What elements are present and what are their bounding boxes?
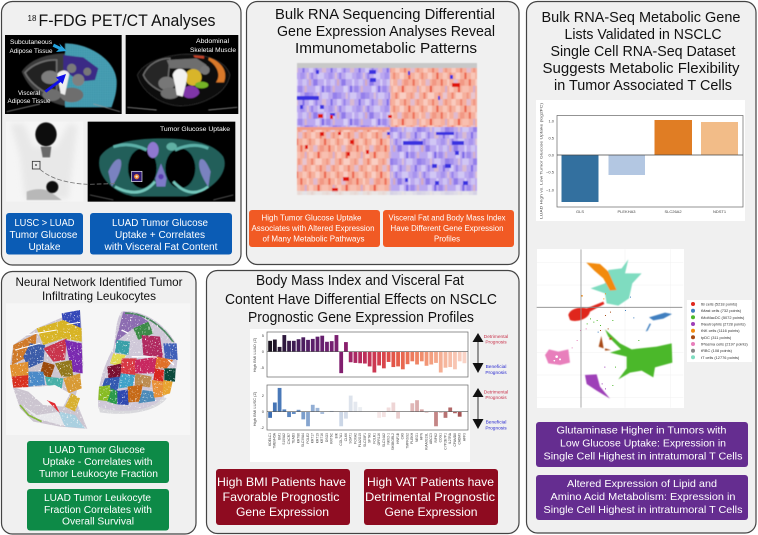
gene name axis labels: TMEM45A: [273, 432, 277, 449]
title: neural network: Neural Network Identified Tumor: [16, 275, 182, 289]
callout: high VAT detrimental: High VAT Patients have: [367, 475, 494, 489]
callout: high VAT detrimental: Gene Expression: [384, 505, 478, 519]
callout: LUSC greater than LUAD: LUSC > LUAD: [14, 218, 74, 229]
callout: high tumor glucose uptake: Associates with Altered Expression: [252, 224, 374, 233]
image: PET/CT fusion slice: [40, 122, 235, 202]
callout: leukocyte fraction correlates with survival: Fraction Correlates with: [44, 505, 152, 516]
callout: visceral fat and BMI: Have Different Gene Expression: [390, 224, 504, 233]
gene name axis labels: S100A2: [282, 433, 286, 445]
panel: BMI and visceral fat prognostic profiles: [206, 270, 519, 534]
legend: cell types: tT cells (12776 points): [701, 355, 740, 360]
callout: LUSC greater than LUAD: Uptake: [28, 242, 61, 253]
panel: single cell validation: [526, 2, 756, 533]
callout: glucose uptake correlates with visceral fat: [90, 213, 232, 254]
legend: cell types: [687, 300, 752, 362]
callout: glutaminase: Glutaminase Higher in Tumors with: [556, 424, 727, 436]
gene name axis labels: AFF3: [462, 433, 466, 441]
callout: glucose uptake correlates with leukocyte fraction: Uptake - Correlates with: [42, 457, 152, 468]
title: BMI and visceral fat: Prognostic Gene Expression Profiles: [248, 309, 474, 326]
image: CT skeletal muscle: [126, 35, 238, 114]
callout: glucose uptake correlates with leukocyte fraction: Tumor Leukocyte Fraction: [39, 469, 158, 480]
label: tumor glucose uptake: Tumor Glucose Uptake: [160, 126, 230, 133]
callout: glutaminase: Single Cell Highest in intratumoral T Cells: [544, 450, 742, 462]
left tissue section: [10, 310, 87, 429]
callout: high tumor glucose uptake: of Many Metabolic Pathways: [262, 234, 364, 244]
gene name axis labels: FOLR1: [372, 433, 376, 444]
arrow: LUSC prognosis direction: Prognosis: [485, 426, 507, 432]
bar chart: high BMI LUAD: [252, 332, 468, 377]
callout: high VAT detrimental: Detrimental Prognostic: [365, 490, 495, 504]
label: visceral adipose tissue: Visceral: [18, 91, 40, 97]
scatter plot: UMAP cell clusters: [537, 249, 684, 408]
gene name axis labels: HNF1B: [396, 432, 400, 444]
callout: lipid and amino acid metabolism: Altered Expression of Lipid and: [567, 478, 717, 490]
gene name axis labels: CADM3: [458, 433, 462, 445]
arrow: LUSC prognosis direction: Detrimental: [484, 390, 508, 396]
image: whole-body PET scan: [6, 122, 83, 202]
bar chart: metabolic genes log2FC: SLC26A2: [664, 209, 682, 214]
title: bulk RNA sequencing: Bulk RNA Sequencing Differential: [275, 6, 495, 23]
callout: high BMI favorable: Favorable Prognostic: [222, 490, 340, 504]
callout: glutaminase: [536, 422, 748, 467]
gene name axis labels: KRT17: [311, 433, 315, 443]
gene name axis labels: NEO1: [415, 433, 419, 442]
bar chart: high BMI LUAD: 0: [262, 349, 265, 354]
title: single cell validation: Lists Validated in NSCLC: [564, 26, 722, 43]
gene name axis labels: ABCC3: [429, 433, 433, 444]
callout: high BMI favorable: [216, 469, 350, 525]
arrow: LUSC prognosis direction: Beneficial: [486, 420, 506, 426]
gene name axis labels: CLK6: [344, 433, 348, 441]
callout: visceral fat and BMI: [383, 210, 514, 247]
bar chart: metabolic genes log2FC: 0.0: [548, 152, 555, 158]
bar chart: metabolic genes log2FC: 1.0: [548, 118, 555, 124]
gene name axis labels: KRT19: [315, 433, 319, 443]
bar chart: high BMI LUAD: 5: [262, 333, 265, 338]
callout: leukocyte fraction correlates with survival: LUAD Tumor Leukocyte: [44, 493, 151, 504]
bar chart: metabolic genes log2FC: [536, 100, 745, 221]
legend: cell types: tNK cells (1116 points): [701, 328, 740, 333]
gene name axis labels: POLE2: [306, 433, 310, 444]
gene name axis labels: SFTA3: [368, 433, 372, 443]
label: subcutaneous adipose tissue: [10, 40, 53, 55]
callout: high BMI favorable: Gene Expression: [236, 505, 329, 519]
title: BMI and visceral fat: Body Mass Index and Visceral Fat: [256, 272, 465, 289]
title: bulk RNA sequencing: Gene Expression Analyses Reveal: [277, 23, 495, 40]
title: bulk RNA sequencing: [275, 6, 495, 57]
arrow: LUSC prognosis direction: [472, 388, 508, 432]
legend: cell types: tB cells (5218 points): [701, 302, 738, 306]
callout: visceral fat and BMI: Visceral Fat and Body Mass Index: [388, 214, 506, 222]
gene name axis labels: TEAD3: [292, 433, 296, 444]
callout: glutaminase: Low Glucose Uptake: Expression in: [560, 438, 726, 450]
chart background: [250, 329, 470, 462]
image: CT adipose tissue: [5, 35, 122, 114]
arrow: LUSC prognosis direction: Prognosis: [485, 395, 507, 401]
title: neural network: [16, 275, 182, 303]
gene name axis labels: CPAMD8: [453, 433, 457, 446]
bar chart: metabolic genes log2FC: NDST1: [713, 209, 727, 214]
bar chart: high BMI LUSC: [252, 385, 468, 430]
callout: high tumor glucose uptake: High Tumor Glucose Uptake: [262, 214, 362, 222]
callout: glucose uptake correlates with visceral fat: Uptake + Correlates: [115, 230, 205, 241]
arrow: LUAD prognosis direction: Prognosis: [485, 340, 507, 346]
gene name axis labels: HPN: [420, 432, 424, 440]
title: PET/CT analyses: 18: [28, 14, 37, 23]
arrow: LUAD prognosis direction: Prognosis: [485, 370, 507, 376]
gene name axis labels: IL27RA: [448, 432, 452, 444]
title: neural network: Infiltrating Leukocytes: [42, 289, 156, 303]
title: PET/CT analyses: F-FDG PET/CT Analyses: [38, 11, 216, 30]
gene name axis labels: BIK: [334, 432, 338, 438]
gene name axis labels: SH3BGRL2: [391, 433, 395, 450]
gene name axis labels: SLC39A4: [301, 433, 305, 447]
gene name axis labels: COG1: [439, 433, 443, 442]
callout: high tumor glucose uptake: [249, 210, 380, 247]
bar chart: high BMI LUAD: -5: [260, 365, 265, 370]
gene name axis labels: SLC35F1: [363, 433, 367, 447]
gene name axis labels: CYP2B7P1: [443, 433, 447, 450]
right tissue section: [98, 311, 178, 414]
label: abdominal skeletal muscle: [190, 39, 237, 54]
gene name axis labels: [268, 432, 466, 450]
callout: LUSC greater than LUAD: Tumor Glucose: [10, 230, 78, 241]
panel: bulk RNA sequencing: [246, 2, 519, 264]
gene name axis labels: CXCR7: [287, 433, 291, 444]
title: single cell validation: [542, 9, 740, 94]
arrow: LUAD prognosis direction: Beneficial: [486, 364, 506, 370]
title: bulk RNA sequencing: Immunometabolic Patterns: [295, 40, 477, 57]
title: BMI and visceral fat: [225, 272, 497, 326]
label: abdominal skeletal muscle: Abdominal: [196, 39, 229, 45]
callout: glucose uptake correlates with leukocyte fraction: [27, 441, 169, 483]
callout: lipid and amino acid metabolism: Single Cell Highest in intratumoral T Cells: [544, 504, 742, 516]
bar chart: high BMI LUSC: High BMI LUSC (Z): [252, 391, 257, 426]
bar chart: metabolic genes log2FC: LUAD High vs. Low Tumor Glucose Uptake (log2FC): [538, 102, 544, 219]
legend: cell types: tMast cells (732 points): [701, 308, 742, 313]
panel: PET/CT analyses: [2, 2, 241, 265]
title: single cell validation: Suggests Metabolic Flexibility: [542, 60, 740, 77]
gene name axis labels: COL7A1: [339, 433, 343, 446]
bar chart: high BMI LUSC: -2: [260, 425, 265, 430]
gene name axis labels: KRT86: [296, 433, 300, 443]
legend: cell types: tPlasma cells (2197 points): [701, 342, 748, 346]
image: tissue segmentation maps: [6, 303, 190, 435]
gene name axis labels: RIPK2: [434, 433, 438, 443]
gene name axis labels: PLA2G10: [358, 433, 362, 447]
heatmap: [297, 63, 477, 195]
gene name axis labels: DSG3: [325, 433, 329, 442]
gene name axis labels: GPR116: [377, 433, 381, 445]
bar chart: high BMI LUSC: 2: [262, 393, 265, 398]
bar chart: metabolic genes log2FC: −0.5: [546, 170, 555, 174]
gene name axis labels: KIAA0319L: [424, 433, 428, 450]
callout: high VAT detrimental: [364, 469, 498, 525]
gene name axis labels: SOAT1: [349, 433, 353, 444]
callout: visceral fat and BMI: Profiles: [434, 234, 460, 244]
gene name axis labels: TMPRSS2: [406, 433, 410, 449]
legend: cell types: tRBC (108 points): [701, 348, 733, 353]
callout: glucose uptake correlates with leukocyte fraction: LUAD Tumor Glucose: [49, 445, 145, 456]
label: visceral adipose tissue: [8, 91, 51, 105]
gene name axis labels: KDELC1: [268, 433, 272, 446]
callout: LUSC greater than LUAD: [6, 213, 83, 254]
gene name axis labels: NKX2-1: [386, 433, 390, 445]
title: single cell validation: Single Cell RNA-Seq Dataset: [550, 43, 736, 60]
callout: leukocyte fraction correlates with survival: [27, 489, 169, 530]
panel: neural network leukocytes: [2, 272, 196, 534]
legend: cell types: tNeutrophils (2728 points): [701, 322, 746, 326]
gene name axis labels: CA9: [401, 433, 405, 439]
arrow: LUAD prognosis direction: Detrimental: [484, 334, 508, 340]
label: visceral adipose tissue: Adipose Tissue: [8, 99, 51, 105]
callout: lipid and amino acid metabolism: Amino Acid Metabolism: Expression in: [550, 491, 736, 503]
bar chart: high BMI LUSC: 0: [262, 409, 265, 414]
title: single cell validation: Bulk RNA-Seq Metabolic Gene: [542, 9, 740, 26]
bar chart: metabolic genes log2FC: 0.5: [548, 136, 555, 140]
title: BMI and visceral fat: Content Have Differential Effects on NSCLC: [225, 291, 497, 308]
title: single cell validation: in Tumor Associated T Cells: [554, 77, 732, 94]
bar chart: metabolic genes log2FC: −1.0: [546, 188, 555, 192]
label: abdominal skeletal muscle: Skeletal Muscle: [190, 48, 237, 54]
arrow: LUAD prognosis direction: [472, 333, 508, 376]
callout: high BMI favorable: High BMI Patients have: [217, 475, 346, 489]
gene name axis labels: PLEKH: [410, 432, 414, 444]
bar chart: metabolic genes log2FC: PLEKHA3: [617, 209, 636, 214]
callout: lipid and amino acid metabolism: [536, 475, 748, 520]
callout: glucose uptake correlates with visceral fat: with Visceral Fat Content: [103, 242, 218, 253]
bar chart: metabolic genes log2FC: GLS: [576, 209, 584, 214]
bar chart: high BMI LUAD: High BMI LUAD (Z): [252, 337, 257, 372]
gene name axis labels: FOXA2: [353, 433, 357, 444]
gene name axis labels: KRT16: [320, 433, 324, 443]
gene name axis labels: BM1: [278, 433, 282, 440]
label: subcutaneous adipose tissue: Adipose Tissue: [10, 49, 53, 55]
gene name axis labels: KRT6C: [330, 432, 334, 444]
callout: leukocyte fraction correlates with survival: Overall Survival: [62, 516, 134, 528]
callout: glucose uptake correlates with visceral fat: LUAD Tumor Glucose: [112, 218, 208, 229]
legend: cell types: tMoMacDC (5072 points): [701, 315, 745, 320]
gene name axis labels: SLC34A2: [382, 433, 386, 447]
label: subcutaneous adipose tissue: Subcutaneous: [10, 40, 52, 46]
legend: cell types: tpDC (311 points): [701, 335, 732, 340]
